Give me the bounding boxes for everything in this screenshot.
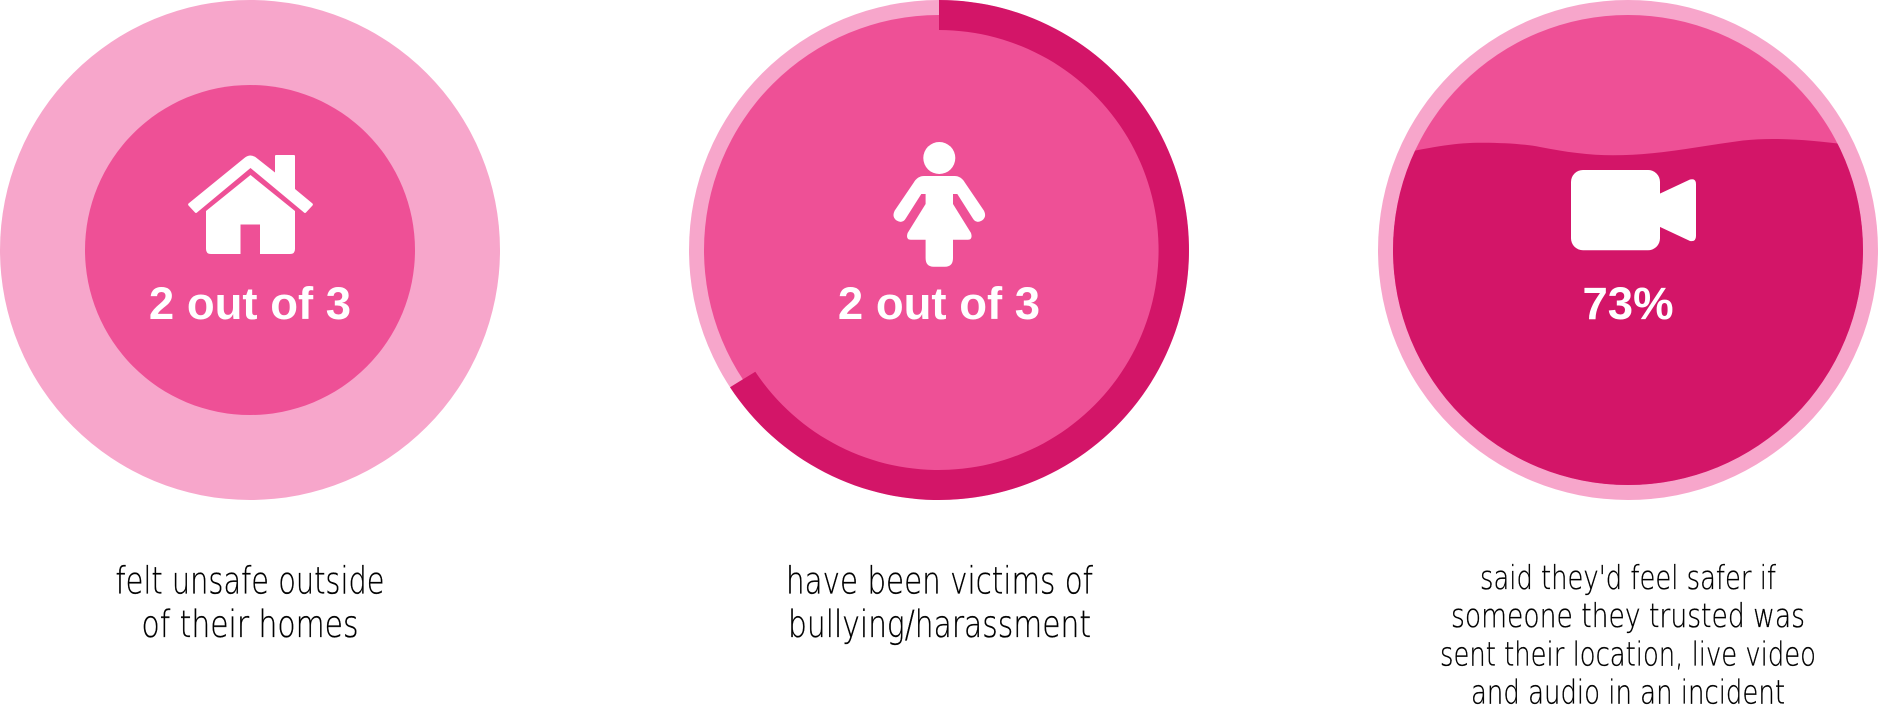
panel: feel safer: [1378, 0, 1878, 500]
caption: feel safer: someone they trusted was: [1451, 596, 1805, 635]
outer circle: [0, 0, 500, 500]
panel: unsafe outside homes: [0, 0, 500, 500]
wave fill: [1393, 139, 1863, 485]
caption: feel safer: [1440, 558, 1816, 711]
caption: feel safer: said they'd feel safer if: [1480, 558, 1776, 597]
caption: felt unsafe: [116, 560, 384, 646]
panel: victims of bullying: [689, 0, 1189, 500]
inner circle: [704, 15, 1174, 485]
caption: have been victims: have been victims of: [786, 560, 1093, 602]
progress arc: [730, 0, 1189, 500]
stat: 73%: 73%: [1582, 278, 1674, 329]
inner circle: [1393, 15, 1863, 485]
caption: felt unsafe: of their homes: [142, 603, 358, 646]
icon: woman: [893, 142, 985, 267]
caption: have been victims: [786, 560, 1093, 646]
outer light ring: [1378, 0, 1878, 500]
outer light ring: [689, 0, 1189, 500]
stat: 2 out of 3: 2 out of 3: [838, 278, 1040, 329]
stat: 2 out of 3: 2 out of 3: [149, 278, 351, 329]
caption: felt unsafe: felt unsafe outside: [116, 560, 384, 602]
caption: have been victims: bullying/harassment: [788, 603, 1091, 646]
caption: feel safer: and audio in an incident: [1471, 672, 1785, 711]
inner circle: [85, 85, 415, 415]
icon: house: [188, 155, 313, 254]
icon: video camera: [1571, 170, 1696, 250]
